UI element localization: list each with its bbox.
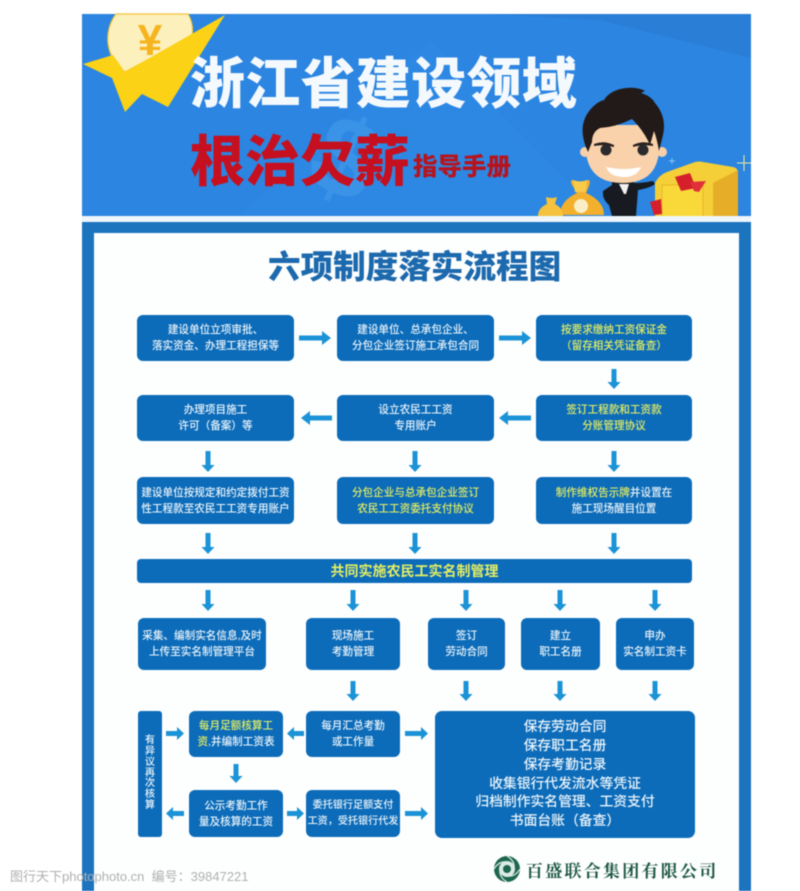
step: collect real-name info: 上传至实名制管理平台 — [149, 646, 255, 658]
step: entrusted payment agreement: 分包企业与总承包企业签订 — [352, 486, 479, 498]
heading: guide manual: 指导手册 — [413, 148, 511, 183]
step: wage card: 申办 — [644, 630, 666, 642]
panel: archive records: 保存考勤记录 — [524, 757, 606, 772]
step: objection recheck: 异 — [145, 746, 155, 757]
arrow: step 4 down — [554, 681, 566, 701]
step: bank payment: 委托银行足额支付 — [313, 800, 393, 810]
step: wage deposit: 按要求缴纳工资保证金 — [561, 324, 667, 336]
arrow: down to row 2 — [608, 369, 620, 389]
step: separate account agreement — [536, 395, 692, 441]
step: monthly attendance summary — [306, 711, 400, 757]
step: publicity: 公示考勤工作 — [204, 800, 268, 812]
panel: archive records: 归档制作实名管理、工资支付 — [475, 794, 655, 809]
arrow: bar to step 2 — [346, 590, 360, 611]
arrow: down col 1 row 2 — [202, 451, 214, 472]
step: project approval: 建设单位立项审批、 — [168, 324, 263, 336]
step: entrusted payment agreement — [337, 477, 494, 524]
arrow: bar to step 4 — [554, 590, 566, 611]
step: publicity: 量及核算的工资 — [199, 816, 273, 828]
step: monthly attendance summary: 或工作量 — [332, 736, 374, 748]
step: wage deposit — [536, 315, 692, 361]
step: wage account: 专用账户 — [394, 420, 437, 432]
step: rights notice board: 施工现场醒目位置 — [572, 502, 656, 514]
step: staff roster: 建立 — [550, 630, 571, 642]
step: monthly payroll — [189, 711, 283, 757]
step: staff roster — [521, 618, 600, 670]
content panel — [94, 233, 739, 891]
step: pay to account: 性工程款至农民工工资专用账户 — [141, 502, 290, 514]
arrow: attendance to archive — [405, 727, 428, 740]
step: construction permit — [137, 395, 294, 441]
step: labor contract: 劳动合同 — [445, 646, 488, 658]
panel: archive records — [435, 711, 695, 838]
step: attendance management: 考勤管理 — [332, 646, 374, 658]
arrow: row 1 right 2 — [499, 331, 531, 345]
step: entrusted payment agreement: 农民工工资委托支付协议 — [357, 502, 474, 514]
header banner: $ — [291, 88, 401, 228]
step: wage deposit: （留存相关凭证备查） — [561, 340, 667, 352]
arrow: bar to step 1 — [202, 590, 214, 611]
arrow: bank to archive — [405, 807, 428, 820]
watermark: 图行天下photophoto.cn 编号：39847221 — [10, 869, 248, 884]
step: sign contract — [337, 315, 494, 361]
icon: company logo — [494, 856, 520, 882]
icon: cartoon businessman — [580, 88, 667, 216]
arrow: step 2 down — [346, 681, 360, 701]
panel: archive records: 书面台账（备查） — [510, 813, 620, 828]
step: objection recheck: 有 — [145, 735, 155, 746]
step: project approval: 落实资金、办理工程担保等 — [152, 340, 279, 352]
step: wage account: 设立农民工工资 — [378, 404, 453, 416]
arrow: publicity to objection — [166, 807, 184, 820]
arrow: down col 3 row 2 — [608, 451, 620, 472]
arrow: payroll to publicity — [230, 764, 242, 783]
heading: province line: 浙江省建设领域 — [190, 39, 577, 119]
arrow: down col 2 row 2 — [408, 451, 422, 472]
chart heading: 六项制度落实流程图 — [268, 241, 561, 288]
arrow: down col 1 row 3 — [202, 533, 214, 554]
step: wage account — [337, 395, 494, 441]
step: objection recheck: 议 — [145, 757, 155, 768]
step: bank payment — [306, 790, 400, 837]
arrow: publicity to bank — [287, 807, 304, 820]
arrow: objection to payroll — [166, 727, 184, 740]
step: monthly attendance summary: 每月汇总考勤 — [321, 720, 385, 732]
icon: star with coin — [83, 14, 225, 112]
step: labor contract: 签订 — [456, 630, 477, 642]
step: sign contract: 建设单位、总承包企业、 — [357, 324, 474, 336]
step: labor contract — [428, 618, 505, 670]
heading: red title: 根治欠薪 — [190, 117, 410, 197]
step: monthly payroll: 每月足额核算工 — [199, 720, 273, 732]
step: rights notice board — [536, 477, 692, 524]
arrow: attendance to payroll — [287, 727, 304, 740]
step: collect real-name info: 采集、编制实名信息,及时 — [142, 630, 262, 642]
arrow: down col 2 row 3 — [408, 533, 422, 554]
step: separate account agreement: 分账管理协议 — [582, 420, 646, 432]
step: objection recheck — [138, 711, 162, 837]
step: publicity — [189, 790, 283, 837]
step: wage card: 实名制工资卡 — [623, 646, 687, 658]
icon: money bags — [538, 180, 604, 216]
panel: archive records: 保存劳动合同 — [524, 719, 606, 734]
step: bank payment: 工资，受托银行代发 — [308, 816, 398, 826]
step: staff roster: 职工名册 — [539, 646, 582, 658]
icon: gold safe with red envelopes — [650, 155, 751, 216]
step: objection recheck: 次 — [145, 778, 155, 789]
arrow: step 3 down — [460, 681, 472, 701]
step: wage card — [616, 618, 694, 670]
step: objection recheck: 核 — [145, 789, 155, 800]
arrow: bar to step 3 — [460, 590, 472, 611]
step: rights notice board: 制作维权告示牌并设置在 — [556, 486, 672, 498]
step: pay to account: 建设单位按规定和约定拨付工资 — [141, 486, 290, 498]
step: separate account agreement: 签订工程款和工资款 — [566, 404, 662, 416]
step: attendance management — [306, 618, 400, 670]
step: construction permit: 许可（备案）等 — [178, 420, 253, 432]
step: collect real-name info — [138, 618, 266, 670]
arrow: down col 3 row 3 — [608, 533, 620, 554]
bar: real-name management — [137, 559, 692, 583]
step: attendance management: 现场施工 — [332, 630, 374, 642]
arrow: row 2 left 2 — [301, 411, 332, 425]
icon: star with coin: ¥ — [138, 16, 163, 65]
step: monthly payroll: 资,并编制工资表 — [197, 736, 275, 748]
step: project approval — [137, 315, 294, 361]
step: pay to account — [137, 477, 294, 524]
step: objection recheck: 算 — [145, 800, 155, 811]
step: construction permit: 办理项目施工 — [184, 404, 247, 416]
arrow: row 1 right — [299, 331, 331, 345]
company name: 百盛联合集团有限公司 — [526, 857, 718, 882]
step: objection recheck: 再 — [145, 768, 155, 779]
arrow: row 2 left — [499, 411, 531, 425]
arrow: step 5 down — [648, 681, 662, 701]
panel: archive records: 收集银行代发流水等凭证 — [489, 776, 641, 790]
arrow: bar to step 5 — [648, 590, 662, 611]
bar: real-name management: 共同实施农民工实名制管理 — [330, 563, 498, 579]
panel: archive records: 保存职工名册 — [524, 738, 606, 753]
step: sign contract: 分包企业签订施工承包合同 — [352, 340, 479, 352]
